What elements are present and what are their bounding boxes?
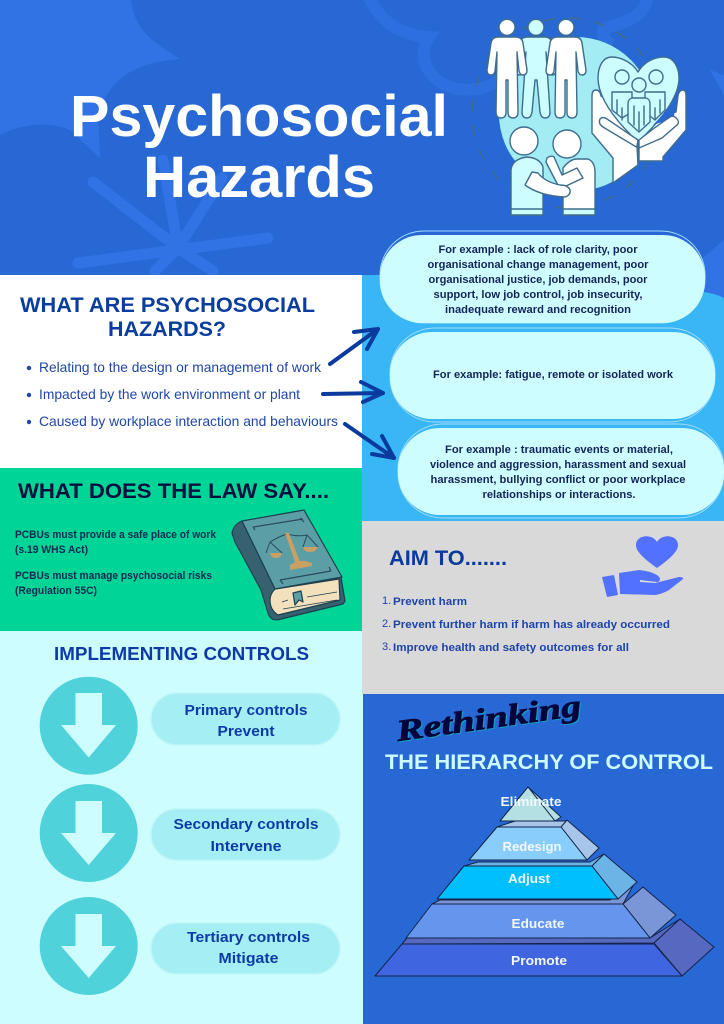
tertiary controls pill: Mitigate: [218, 950, 278, 967]
callout: environment examples: For example: fatigue, remote or isolated work: [433, 369, 674, 381]
law text: [15, 529, 217, 597]
panel: hierarchy of control: [363, 689, 724, 1024]
icon: arrow circle one: [40, 677, 138, 775]
pyramid level: redesign: [469, 820, 599, 860]
panel: implementing controls: [0, 631, 363, 1024]
icon: people and care illustration: [451, 0, 686, 229]
pyramid level: adjust: [437, 854, 637, 899]
heading: the hierarchy of control: THE HIERARCHY OF CONTROL: [385, 751, 713, 774]
callout: interaction examples: relationships or interactions.: [482, 489, 636, 501]
pyramid level: educate: [406, 886, 676, 938]
numbered list: Prevent further harm if harm has already occurred: [393, 619, 670, 631]
secondary controls pill: [151, 809, 340, 860]
icon: arrow circle three: [40, 897, 138, 995]
panel: aim to: [362, 521, 724, 694]
callout: interaction examples: violence and aggression, harassment and sexual: [430, 459, 686, 471]
primary controls pill: Prevent: [218, 723, 275, 740]
panel: what are psychosocial hazards: [0, 275, 362, 468]
script heading: rethinking: [393, 689, 584, 749]
icon: arrow circle two: [40, 784, 138, 882]
pyramid level: educate: Educate: [512, 916, 564, 931]
numbered list: 1.: [382, 595, 391, 607]
panel: examples background: [362, 240, 724, 521]
secondary controls pill: Secondary controls: [174, 816, 318, 833]
law text: PCBUs must provide a safe place of work: [15, 529, 217, 541]
pyramid level: adjust: Adjust: [508, 871, 551, 886]
icon: law book: [232, 510, 345, 620]
heading: aim to: AIM TO.......: [389, 547, 507, 570]
numbered list: Prevent harm: [393, 596, 467, 608]
chart: control pyramid: [375, 787, 714, 976]
bullet list: [27, 359, 338, 429]
callout: interaction examples: For example : traumatic events or material,: [445, 444, 673, 456]
pyramid level: promote: Promote: [511, 953, 567, 968]
bullet list: Impacted by the work environment or plant: [39, 386, 300, 402]
heading: what are psychosocial hazards: HAZARDS?: [108, 318, 226, 341]
icon: hand holding heart: [602, 536, 683, 597]
callout: organisational examples: organisational change management, poor: [428, 259, 649, 271]
script heading: rethinking: Rethinking: [393, 689, 583, 748]
numbered list: [382, 595, 670, 654]
law text: (s.19 WHS Act): [15, 544, 88, 556]
heading: law: WHAT DOES THE LAW SAY....: [18, 480, 329, 503]
tertiary controls pill: [151, 923, 340, 974]
arrow: interaction to examples: [345, 424, 394, 458]
secondary controls pill: Intervene: [210, 838, 282, 855]
panel: what does the law say: [0, 468, 362, 631]
arrow: environment to examples: [323, 382, 383, 402]
callout: organisational examples: support, low job control, job insecurity,: [434, 289, 642, 301]
callout: organisational examples: For example : lack of role clarity, poor: [438, 244, 638, 256]
numbered list: 3.: [382, 641, 391, 653]
script heading: rethinking: Rethinking: [394, 690, 584, 749]
callout: environment examples: [390, 328, 715, 422]
arrow: design to organisational examples: [330, 329, 378, 364]
law text: PCBUs must manage psychosocial risks: [15, 570, 212, 582]
heading: implementing controls: IMPLEMENTING CONTROLS: [54, 644, 309, 664]
callout: interaction examples: harassment, bullying conflict or poor workplace: [430, 474, 686, 486]
pyramid level: eliminate: Eliminate: [500, 794, 562, 809]
bullet list: Caused by workplace interaction and behaviours: [39, 413, 338, 429]
callout: organisational examples: inadequate reward and recognition: [445, 304, 631, 316]
title: Psychosocial: [70, 84, 448, 149]
pyramid level: promote: [375, 919, 714, 976]
pyramid level: eliminate: [500, 787, 562, 821]
primary controls pill: Primary controls: [184, 702, 308, 719]
bullet list: Relating to the design or management of work: [39, 359, 322, 375]
pyramid level: redesign: Redesign: [502, 839, 562, 854]
numbered list: 2.: [382, 618, 391, 630]
numbered list: Improve health and safety outcomes for all: [393, 642, 629, 654]
title: Hazards: [143, 145, 375, 210]
law text: (Regulation 55C): [15, 585, 97, 597]
primary controls pill: [151, 693, 340, 745]
heading: what are psychosocial hazards: WHAT ARE PSYCHOSOCIAL: [20, 294, 315, 317]
callout: organisational examples: [380, 231, 705, 323]
tertiary controls pill: Tertiary controls: [187, 929, 310, 946]
callout: organisational examples: organisational justice, job demands, poor: [428, 274, 648, 286]
callout: interaction examples: [398, 424, 724, 518]
panel: header background: [0, 0, 724, 300]
heading: what are psychosocial hazards: [20, 294, 315, 341]
title: [70, 84, 448, 210]
